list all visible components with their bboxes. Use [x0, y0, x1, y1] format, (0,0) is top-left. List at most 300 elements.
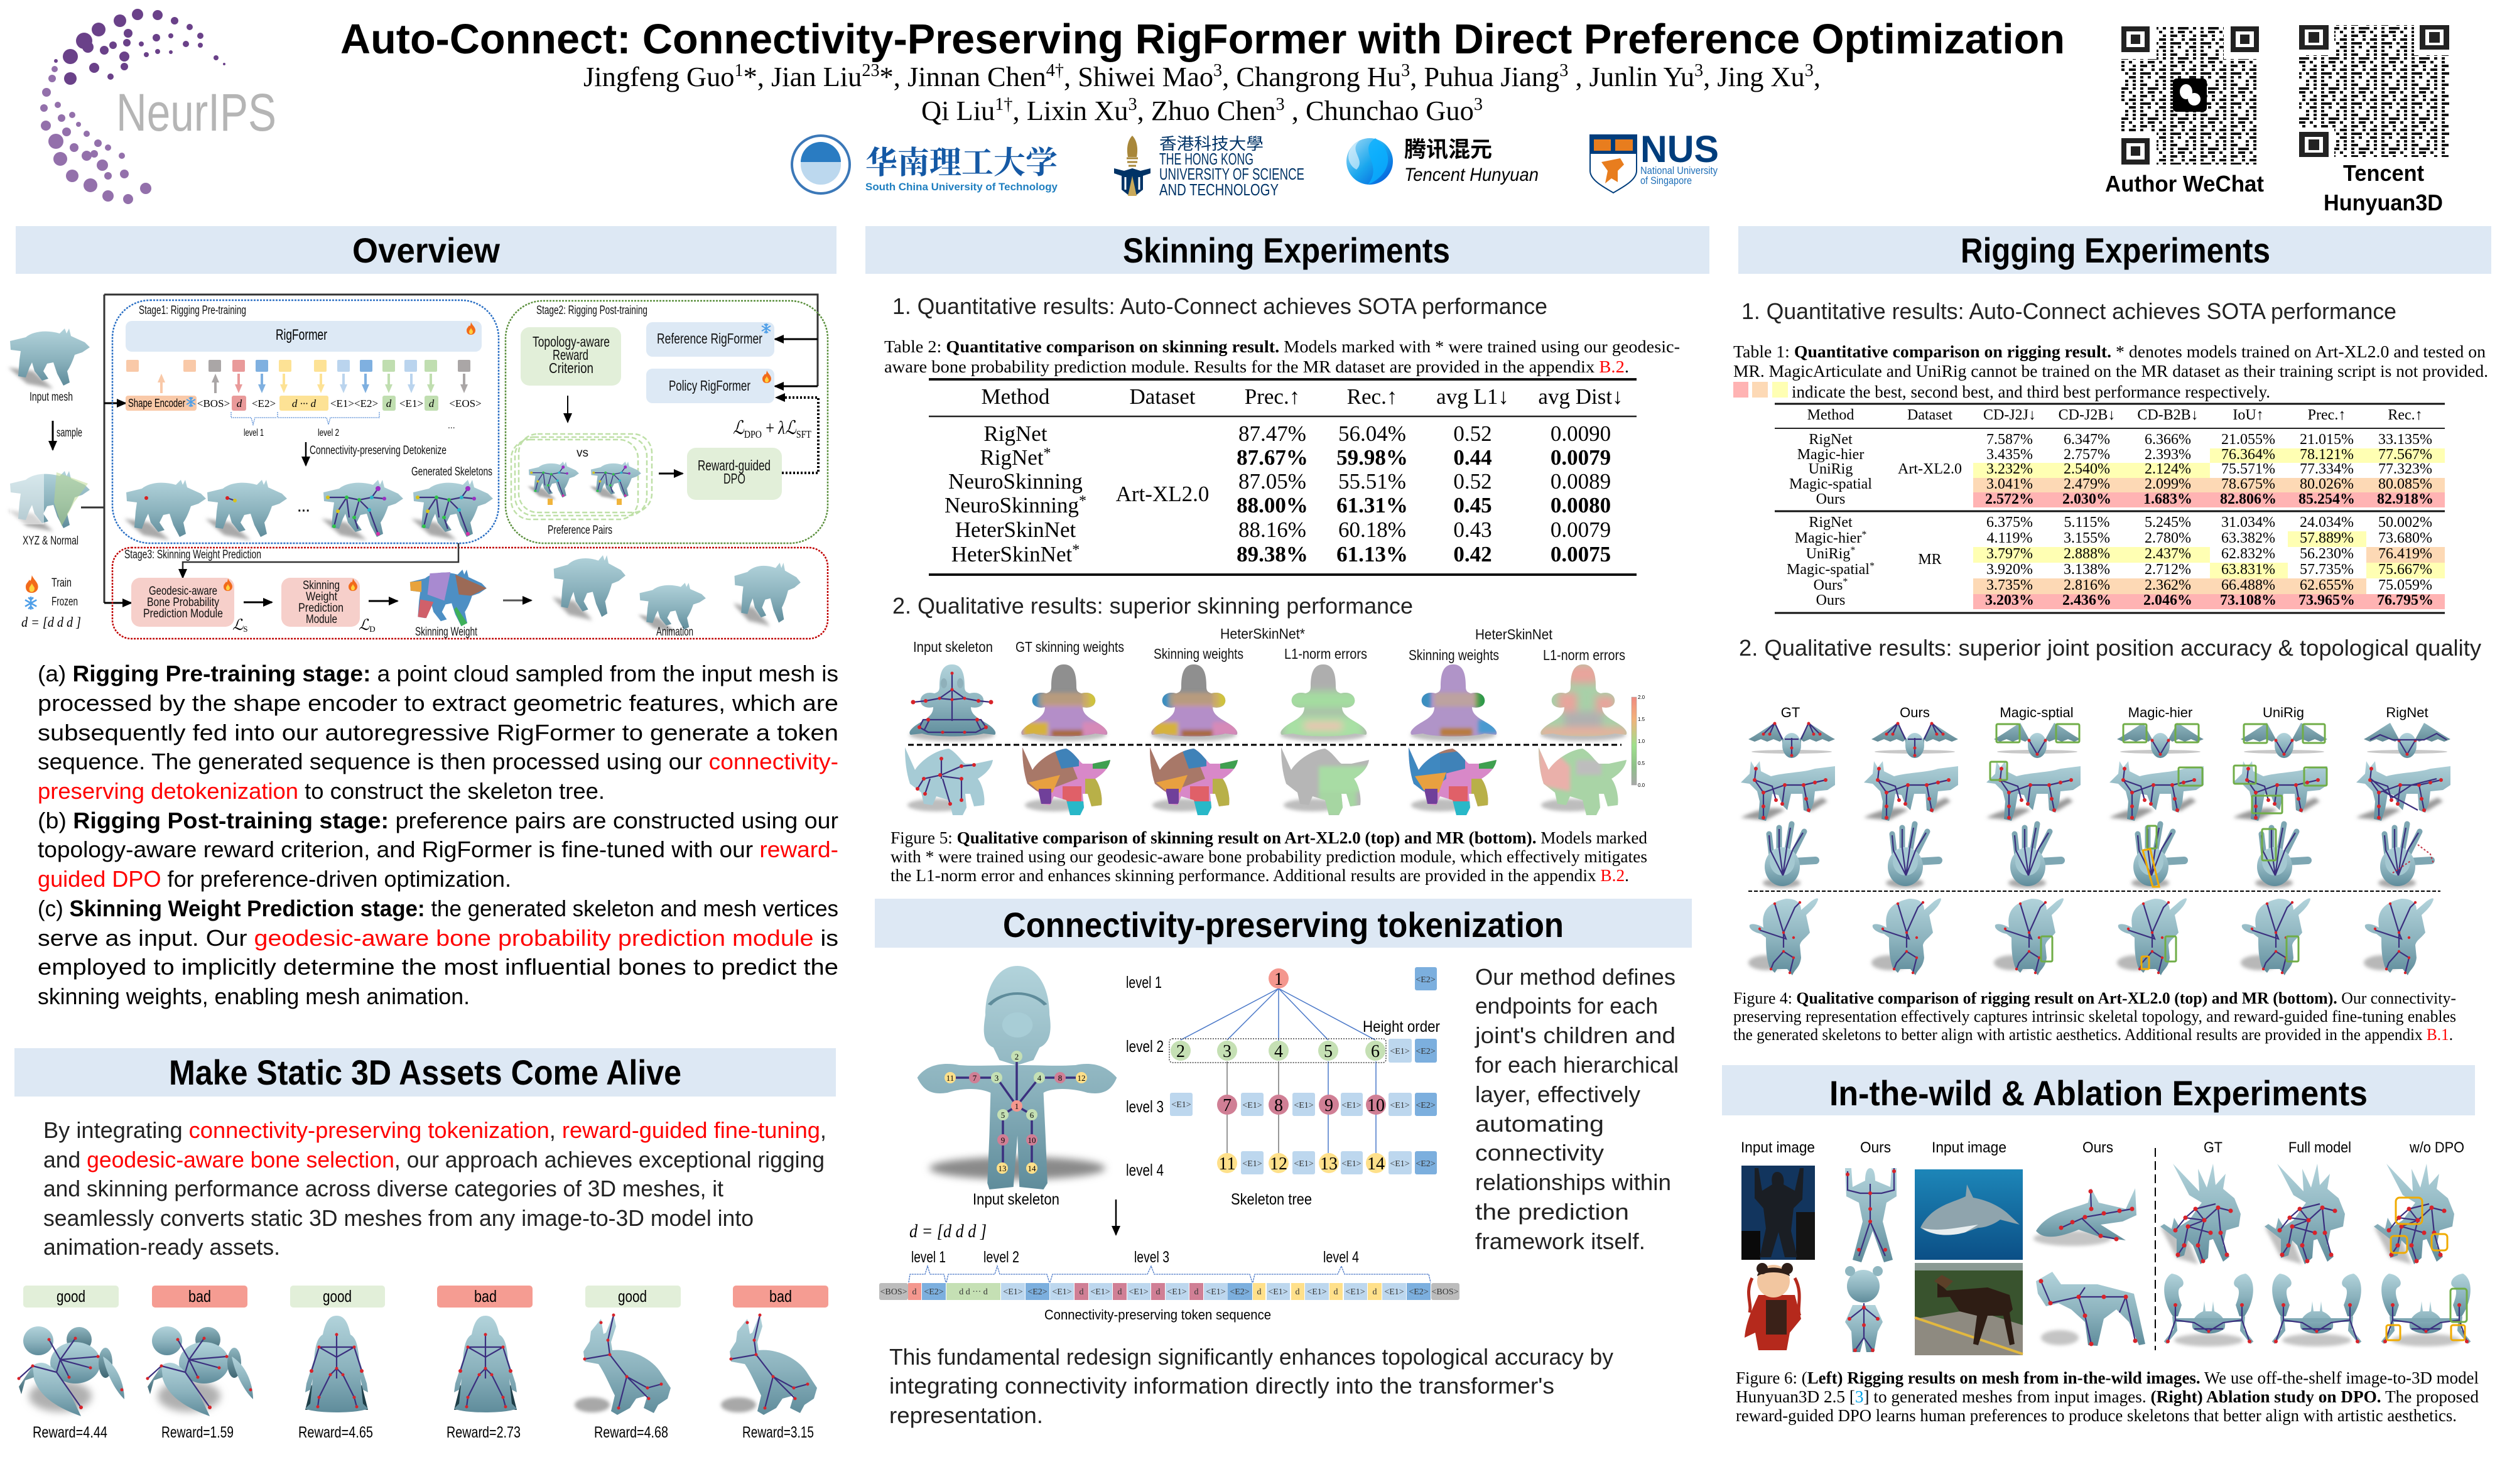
heading: Skinning Experiments [865, 226, 1709, 274]
reference RigFormer: Reference RigFormer [657, 330, 762, 347]
table 2: skinning results: 0.42 [1453, 542, 1492, 566]
table 2: skinning results: avg Dist↓ [1538, 384, 1623, 409]
level labels and braces: level 2 [983, 1248, 1019, 1266]
panel: overview pipeline diagram [8, 295, 828, 639]
table 1: rigging results: 2.046% [2143, 592, 2192, 609]
table 2: skinning results: HeterSkinNet [951, 542, 1080, 566]
arrow to preference pairs [567, 396, 568, 422]
token bar: <E1> [1167, 1287, 1187, 1297]
token bar: <E1> [1090, 1287, 1110, 1297]
authors: , Lixin Xu [1013, 95, 1128, 126]
loss formula: SFT [796, 428, 812, 440]
table 2: skinning results: 61.13% [1336, 542, 1408, 566]
table 1: rigging results: * [1861, 529, 1866, 540]
geodesic-aware module: Geodesic-aware [149, 585, 217, 598]
skeleton joints: 3 [995, 1073, 999, 1083]
column labels: L1-norm errors [1543, 647, 1625, 663]
text block: make static assets: By integrating connectivity-preserving tokenization, reward-guided fine-tuning, [43, 1117, 826, 1143]
table 2: skinning results: 0.0079 [1551, 517, 1611, 542]
authors: 3 [1559, 61, 1568, 80]
table 1: rigging results: 63.831% [2221, 561, 2275, 578]
level braces: ... [448, 420, 455, 430]
text block: overview stages [38, 661, 838, 1009]
mesh: armoured figure [1845, 1168, 1897, 1262]
table 1: rigging results: * [1870, 561, 1875, 571]
table 2: skinning results: 0.0090 [1551, 421, 1611, 446]
table 1: rigging results: 77.323% [2378, 461, 2432, 477]
geodesic-aware module: S [243, 624, 248, 634]
authors: 1 [734, 61, 744, 80]
table 1: rigging results: 3.797% [1986, 546, 2033, 562]
pair: bunny good: good [618, 1287, 647, 1306]
text block: tokenization summary: This fundamental redesign significantly enhances topological accuracy by [889, 1344, 1613, 1370]
end tokens: <E1> [1390, 1101, 1410, 1110]
tree nodes: 12 [1270, 1154, 1287, 1174]
loss formula: ℒ [733, 418, 747, 438]
text block: overview stages: topology-aware reward criterion, and RigFormer is fine-tuned with our reward- [38, 837, 838, 862]
table 1: rigging results: 2.030% [2062, 491, 2111, 507]
text block: tokenization summary [889, 1344, 1613, 1428]
input token row: d [429, 398, 435, 409]
level labels and braces [909, 1248, 1431, 1282]
token bar: d [1257, 1287, 1261, 1297]
logo: NUS: of Singapore [1640, 175, 1692, 187]
token bar: <E1> [1345, 1287, 1365, 1297]
table 2: skinning results: 87.47% [1238, 421, 1306, 446]
input token row: <E1> [399, 398, 423, 409]
table 2: skinning results: * [1072, 542, 1080, 558]
token bar: <E1> [1384, 1287, 1404, 1297]
text block: method description: Our method defines [1475, 964, 1676, 990]
arrow [244, 602, 272, 603]
text block: method description: the prediction [1475, 1199, 1629, 1225]
table 1: rigging results: 85.254% [2298, 491, 2355, 507]
table 1: rigging results: 6.375% [1986, 514, 2033, 531]
figure 5 caption [891, 828, 1647, 885]
table 1: rigging results: 77.334% [2300, 461, 2354, 477]
table 1: rigging results: 78.675% [2221, 476, 2275, 492]
subheading: skinning quantitative: 1. Quantitative results: Auto-Connect achieves SOTA performance [892, 293, 1547, 319]
authors: 3 [1694, 61, 1703, 80]
skeleton joints: 7 [973, 1073, 977, 1083]
table 1: rigging results: 3.138% [2064, 561, 2110, 578]
end tokens: <E1> [1294, 1159, 1314, 1169]
end tokens: <E2> [1416, 1047, 1436, 1056]
table 1: rigging results: 2.479% [2064, 476, 2110, 492]
table 1: rigging results: 2.436% [2062, 592, 2111, 609]
table 1: rigging results: CD-J2B↓ [2059, 407, 2115, 423]
geodesic-aware module: Bone Probability [147, 596, 219, 609]
tree nodes: 6 [1371, 1042, 1380, 1061]
table 1: rigging results: Magic-spatial [1789, 476, 1872, 492]
bottom row: dinosaur meshes [905, 747, 1627, 816]
authors: , Chunchao Guo [1285, 95, 1474, 126]
table 1: rigging results: * [1850, 545, 1855, 556]
table 2: skinning results: 0.45 [1453, 493, 1492, 517]
heading: Skinning Experiments: Skinning Experiments [1123, 230, 1450, 270]
skeleton joints: 2 [1015, 1052, 1019, 1061]
text block: overview stages: skinning weights, enabling mesh animation. [38, 983, 470, 1009]
figure 6 caption: reward-guided DPO learns human preferences to produce skeletons that better align with artistic aesthetics. [1736, 1406, 2457, 1425]
table 1: rigging results: 3.435% [1986, 447, 2033, 463]
loss formula: + [762, 418, 778, 438]
end tokens: <E1> [1242, 1159, 1262, 1169]
table 2: skinning results: 87.05% [1238, 469, 1306, 494]
skeleton joints: 5 [1001, 1110, 1005, 1120]
heading: Rigging Experiments: Rigging Experiments [1961, 230, 2270, 270]
skeleton joints: 6 [1030, 1110, 1034, 1120]
logo: HKUST [1114, 134, 1304, 199]
title: Auto-Connect: Connectivity-Preserving RigFormer with Direct Preference Optimization [340, 16, 2065, 63]
token bar: <E2> [1230, 1287, 1250, 1297]
column labels: HeterSkinNet [1475, 626, 1553, 642]
end tokens: <E2> [1416, 1101, 1436, 1110]
table 2: skinning results: * [1044, 445, 1051, 462]
table 1: rigging results: 2.362% [2145, 577, 2191, 593]
table 1: rigging results: 57.889% [2300, 530, 2354, 546]
table 2: skinning results: HeterSkinNet [955, 517, 1076, 542]
table 1: rigging results: 75.571% [2221, 461, 2275, 477]
mesh: cartoon child [1845, 1266, 1883, 1352]
reference RigFormer [646, 322, 774, 357]
logo: South China University of Technology: 华南理工大学 [865, 145, 1058, 180]
level braces [231, 412, 455, 438]
token bar: d [912, 1287, 917, 1297]
cell highlights [1973, 448, 2445, 609]
QR caption: Author WeChat: Author WeChat [2105, 171, 2264, 197]
column labels: w/o DPO [2409, 1139, 2464, 1156]
photo: moose on road [1915, 1263, 2023, 1355]
input token row [126, 396, 482, 411]
table 1: rigging results: 73.108% [2220, 592, 2276, 609]
text block: make static assets: animation-ready assets. [43, 1234, 280, 1260]
photo: armoured figure [1741, 1166, 1815, 1260]
table 1: rigging results: 75.667% [2378, 561, 2432, 578]
table 1: rigging results: CD-J2J↓ [1983, 407, 2036, 423]
pair: wizard bad: Reward=2.73 [447, 1424, 521, 1441]
text block: overview stages: processed by the shape encoder to extract geometric features, which are [38, 690, 838, 716]
table 1: rigging results: 56.230% [2300, 546, 2354, 562]
text block: method description: layer, effectively [1475, 1081, 1640, 1107]
QR code: author WeChat [2121, 26, 2259, 165]
colour bar: 2.0 [1638, 695, 1645, 700]
authors: , Zhuo Chen [1137, 95, 1276, 126]
table 1: rigging results: Magic-spatial [1787, 561, 1875, 578]
tree nodes: 9 [1324, 1096, 1333, 1115]
tree nodes: 7 [1223, 1096, 1232, 1115]
table 1: rigging results: 3.041% [1986, 476, 2033, 492]
column labels: Input image [1932, 1139, 2006, 1156]
stage 3 panel: Stage3: Skinning Weight Prediction [124, 548, 261, 561]
table 1: rigging results: 78.121% [2300, 447, 2354, 463]
token bar: d d ··· d [959, 1287, 988, 1297]
authors: , Changrong Hu [1222, 62, 1401, 92]
end tokens: <E1> [1242, 1101, 1262, 1110]
QR caption: Tencent Hunyuan3D: Hunyuan3D [2324, 190, 2443, 215]
pair: bunny bad: Reward=3.15 [742, 1424, 814, 1441]
table 1: rigging results: 3.735% [1986, 577, 2033, 593]
skeleton joints: 13 [999, 1164, 1006, 1173]
token bar: <E2> [1409, 1287, 1429, 1297]
text block: make static assets [43, 1117, 826, 1260]
pair: crab bad [146, 1286, 253, 1441]
logo: Tencent Hunyuan [1346, 138, 1539, 185]
colour bar: 0.5 [1638, 761, 1645, 766]
table 2: skinning results: RigNet [983, 421, 1048, 446]
logo: HKUST: AND TECHNOLOGY [1159, 180, 1279, 199]
table 1: rigging results: 82.918% [2377, 491, 2434, 507]
logo: South China University of Technology [792, 136, 1058, 193]
table 1: rigging results: 63.382% [2221, 530, 2275, 546]
table 1: rigging results: Art-XL2.0 [1898, 461, 1962, 477]
table 1: rigging results: 80.085% [2378, 476, 2432, 492]
table 2: skinning results: 60.18% [1338, 517, 1406, 542]
skeleton joints: 8 [1058, 1073, 1062, 1083]
table 1: rigging results: 2.437% [2145, 546, 2191, 562]
skeleton joints: 4 [1037, 1073, 1042, 1083]
table 1: rigging results: 33.135% [2378, 431, 2432, 448]
level labels and braces: level 3 [1134, 1248, 1169, 1266]
table 1: rigging results: 2.393% [2145, 447, 2191, 463]
level labels and braces: level 4 [1323, 1248, 1359, 1266]
table 1: rigging results: 80.026% [2300, 476, 2354, 492]
text block: overview stages: employed to implicitly determine the most influential bones to predict the [38, 954, 838, 980]
table 1: rigging results: MR [1918, 551, 1942, 568]
table 1: rigging results: Ours [1816, 491, 1845, 507]
table 1 caption: indicate the best, second best, and third best performance respectively. [1792, 382, 2270, 401]
table 1: rigging results: 24.034% [2300, 514, 2354, 531]
table 1: rigging results: 73.680% [2378, 530, 2432, 546]
RigFormer block: RigFormer [276, 327, 327, 344]
text block: tokenization summary: integrating connectivity information directly into the transformer's [889, 1373, 1554, 1399]
text block: overview stages: serve as input. Our geodesic-aware bone probability prediction module is [38, 925, 838, 951]
authors: 3 [1128, 95, 1137, 114]
method labels: Ours [1900, 705, 1930, 720]
table 2: skinning results: 0.0079 [1551, 445, 1611, 470]
text block: overview stages: subsequently fed into our autoregressive RigFormer to generate a token [38, 720, 838, 745]
table 1: rigging results: 2.572% [1985, 491, 2034, 507]
preference pairs: vs [577, 447, 588, 460]
heading: Make Static 3D Assets Come Alive: Make Static 3D Assets Come Alive [169, 1053, 681, 1092]
topology-aware reward criterion: Reward [553, 347, 588, 363]
stage 2 panel: Stage2: Rigging Post-training [536, 304, 647, 317]
legend: train and frozen: Train [51, 577, 72, 590]
token bar: <E2> [1027, 1287, 1048, 1297]
input token row: <E2> [252, 398, 276, 409]
generated skeleton wolves: ··· [298, 504, 310, 518]
animation wolves: Animation [656, 626, 693, 639]
table 2: skinning results: 88.16% [1238, 517, 1306, 542]
table 1: rigging results: 5.115% [2064, 514, 2110, 531]
row divider [1748, 891, 2440, 892]
colour bar: 1.5 [1638, 717, 1645, 722]
table 1: rigging results: Prec.↑ [2308, 407, 2346, 423]
tree nodes: 1 [1274, 970, 1283, 989]
skinning weight module: Skinning [303, 579, 340, 592]
method labels: Magic-sptial [2000, 705, 2074, 720]
table 1: rigging results: 31.034% [2221, 514, 2275, 531]
token bar: <E1> [1268, 1287, 1288, 1297]
table 2: skinning results: 59.98% [1336, 445, 1408, 470]
photo: shark [1915, 1169, 2023, 1260]
text block: method description: framework itself. [1475, 1228, 1645, 1254]
method labels: Magic-hier [2128, 705, 2192, 720]
preference pairs [511, 434, 652, 537]
level labels: level 1 [1126, 973, 1162, 992]
reward-guided DPO: DPO [723, 470, 745, 487]
token bar: d [1079, 1287, 1084, 1297]
figure 4 caption: Figure 4: Qualitative comparison of rigging result on Art-XL2.0 (top) and MR (bottom). Our connectivity- [1733, 989, 2456, 1007]
token bar: d [1295, 1287, 1300, 1297]
authors: 3 [1474, 95, 1483, 114]
table 1: rigging results: 2.099% [2145, 476, 2191, 492]
table 1: rigging results: UniRig [1806, 545, 1855, 562]
column labels: Ours [1860, 1139, 1891, 1156]
authors: *, Jian Liu [744, 62, 862, 92]
pair: wizard bad: bad [474, 1287, 497, 1306]
text block: overview stages: (c) Skinning Weight Prediction stage: the generated skeleton and mesh vertices [38, 896, 838, 921]
stage 1 panel: Stage1: Rigging Pre-training [139, 304, 246, 317]
QR caption: Tencent Hunyuan3D: Tencent [2343, 160, 2424, 186]
token bar: d [1118, 1287, 1122, 1297]
table 1: rigging results: * [1843, 577, 1848, 587]
table 1: rigging results: Magic-hier [1795, 529, 1866, 546]
input token row: <EOS> [449, 398, 482, 409]
logo: HKUST: 香港科技大學 [1159, 134, 1264, 153]
table 2: skinning results [929, 379, 1637, 575]
table 1: rigging results: 21.015% [2300, 431, 2354, 448]
text block: method description: joint's children and [1475, 1022, 1676, 1048]
skinning weight module: D [369, 624, 376, 634]
tree nodes: 14 [1367, 1154, 1385, 1174]
geodesic-aware module: ℒ [232, 617, 243, 634]
table 2 caption: Table 2: Quantitative comparison on skinning result. Models marked with * were trained using our geodesic- [884, 337, 1680, 356]
figure 6 caption [1736, 1368, 2479, 1425]
authors: 23 [862, 61, 880, 80]
token bar: d [1156, 1287, 1161, 1297]
figure 6 caption: Figure 6: (Left) Rigging results on mesh from in-the-wild images. We use off-the-shelf image-to-3D model [1736, 1368, 2479, 1387]
photo: cartoon child [1745, 1263, 1801, 1350]
pair: wizard good: good [323, 1287, 352, 1306]
table 1: rigging results: 3.155% [2064, 530, 2110, 546]
figure 4 caption [1733, 989, 2456, 1044]
table 2: skinning results: 89.38% [1237, 542, 1308, 566]
XYZ and normal point cloud: XYZ & Normal [23, 534, 78, 548]
text block: method description: automating [1475, 1111, 1604, 1137]
tree nodes: 10 [1367, 1096, 1385, 1115]
arrows into stages [53, 339, 818, 603]
legend: train and frozen [21, 575, 81, 630]
authors: 1† [995, 95, 1013, 114]
text block: make static assets: and skinning performance across diverse categories of 3D meshes, it [43, 1176, 723, 1201]
arrow to reward-guided DPO [659, 472, 683, 475]
table 2: skinning results: 0.43 [1453, 517, 1492, 542]
table 1: rigging results: 2.124% [2145, 461, 2191, 477]
row: creature [1748, 898, 2434, 975]
method labels: UniRig [2263, 705, 2304, 720]
skinning weight wolf: Skinning Weight [415, 626, 478, 639]
legend: train and frozen: d = [d d d ] [21, 614, 81, 630]
input token row: <E1><E2> [330, 398, 378, 409]
pair: crab bad: bad [188, 1287, 211, 1306]
tree nodes: 2 [1176, 1042, 1185, 1061]
row: hand [1763, 824, 2434, 888]
table 1: rigging results: 2.888% [2064, 546, 2110, 562]
row divider [908, 744, 1621, 746]
table 1: rigging results: 73.965% [2298, 592, 2355, 609]
table 1: rigging results: 75.059% [2378, 577, 2432, 593]
pair: wizard good: Reward=4.65 [298, 1424, 373, 1441]
column labels [913, 626, 1625, 663]
token bar: <E1> [1129, 1287, 1149, 1297]
table 2: skinning results: 88.00% [1237, 493, 1308, 517]
table 1: rigging results: 50.002% [2378, 514, 2432, 531]
table 2: skinning results: 0.52 [1453, 421, 1492, 446]
column labels: L1-norm errors [1284, 646, 1367, 662]
pair: crab bad: Reward=1.59 [161, 1424, 234, 1441]
figure: input skeleton mesh [918, 966, 1117, 1208]
token sequence: Connectivity-preserving token sequence [1044, 1307, 1271, 1323]
authors: 3 [1805, 61, 1814, 80]
authors: , Puhua Jiang [1410, 62, 1559, 92]
table 1: rigging results: 57.735% [2300, 561, 2354, 578]
left/right divider [2155, 1148, 2156, 1350]
end tokens: <E1> [1341, 1101, 1362, 1110]
method labels: RigNet [2386, 705, 2428, 720]
table 1: rigging results: 2.780% [2145, 530, 2191, 546]
stage 1 panel [112, 300, 499, 543]
topology-aware reward criterion [521, 327, 621, 386]
authors: *, Jinnan Chen [880, 62, 1046, 92]
subheading: rigging qualitative: 2. Qualitative results: superior joint position accuracy & topological quality [1739, 635, 2481, 661]
text block: make static assets: and geodesic-aware bone selection, our approach achieves exceptional rigging [43, 1147, 825, 1173]
end tokens: <E1> [1390, 1047, 1410, 1056]
column labels: GT [2204, 1139, 2222, 1156]
tree nodes: 4 [1274, 1042, 1283, 1061]
column labels: HeterSkinNet* [1220, 626, 1305, 642]
authors: , Jing Xu [1703, 62, 1805, 92]
authors: 4† [1046, 61, 1064, 80]
logo: NeurIPS [40, 9, 276, 204]
end tokens: <E2> [1416, 1159, 1436, 1169]
pipeline connector lines [81, 295, 818, 603]
logo: NUS: NUS [1640, 128, 1719, 170]
skeleton joints: 1 [1015, 1102, 1019, 1111]
pair: wizard bad [437, 1286, 533, 1441]
tree nodes: 5 [1324, 1042, 1333, 1061]
geodesic-aware module: Prediction Module [143, 607, 223, 620]
label: sample: sample [57, 426, 82, 440]
figure 6 caption: Hunyuan3D 2.5 [3] to generated meshes from input images. (Right) Ablation study on DPO. The proposed [1736, 1387, 2479, 1406]
pair: wizard good [290, 1286, 385, 1441]
colour bar: 0.0 [1638, 783, 1645, 788]
skeleton joints: 11 [946, 1073, 954, 1083]
arrow [369, 600, 398, 602]
ablation: spiky creature [2160, 1164, 2454, 1264]
reward-guided DPO: Reward-guided [698, 457, 771, 474]
column labels: Input skeleton [913, 639, 993, 655]
table 1: rigging results: 3.203% [1985, 592, 2034, 609]
column labels: Skinning weights [1409, 647, 1499, 663]
authors: 3 [1213, 61, 1222, 80]
heading: Make Static 3D Assets Come Alive [14, 1048, 836, 1097]
tree nodes: 3 [1223, 1042, 1232, 1061]
policy RigFormer [646, 369, 774, 403]
table 2: skinning results: Dataset [1130, 384, 1196, 409]
text block: make static assets: seamlessly converts static 3D meshes from any image-to-3D model into [43, 1205, 754, 1231]
tree nodes: 8 [1274, 1096, 1283, 1115]
topology-aware reward criterion: Criterion [549, 360, 593, 376]
